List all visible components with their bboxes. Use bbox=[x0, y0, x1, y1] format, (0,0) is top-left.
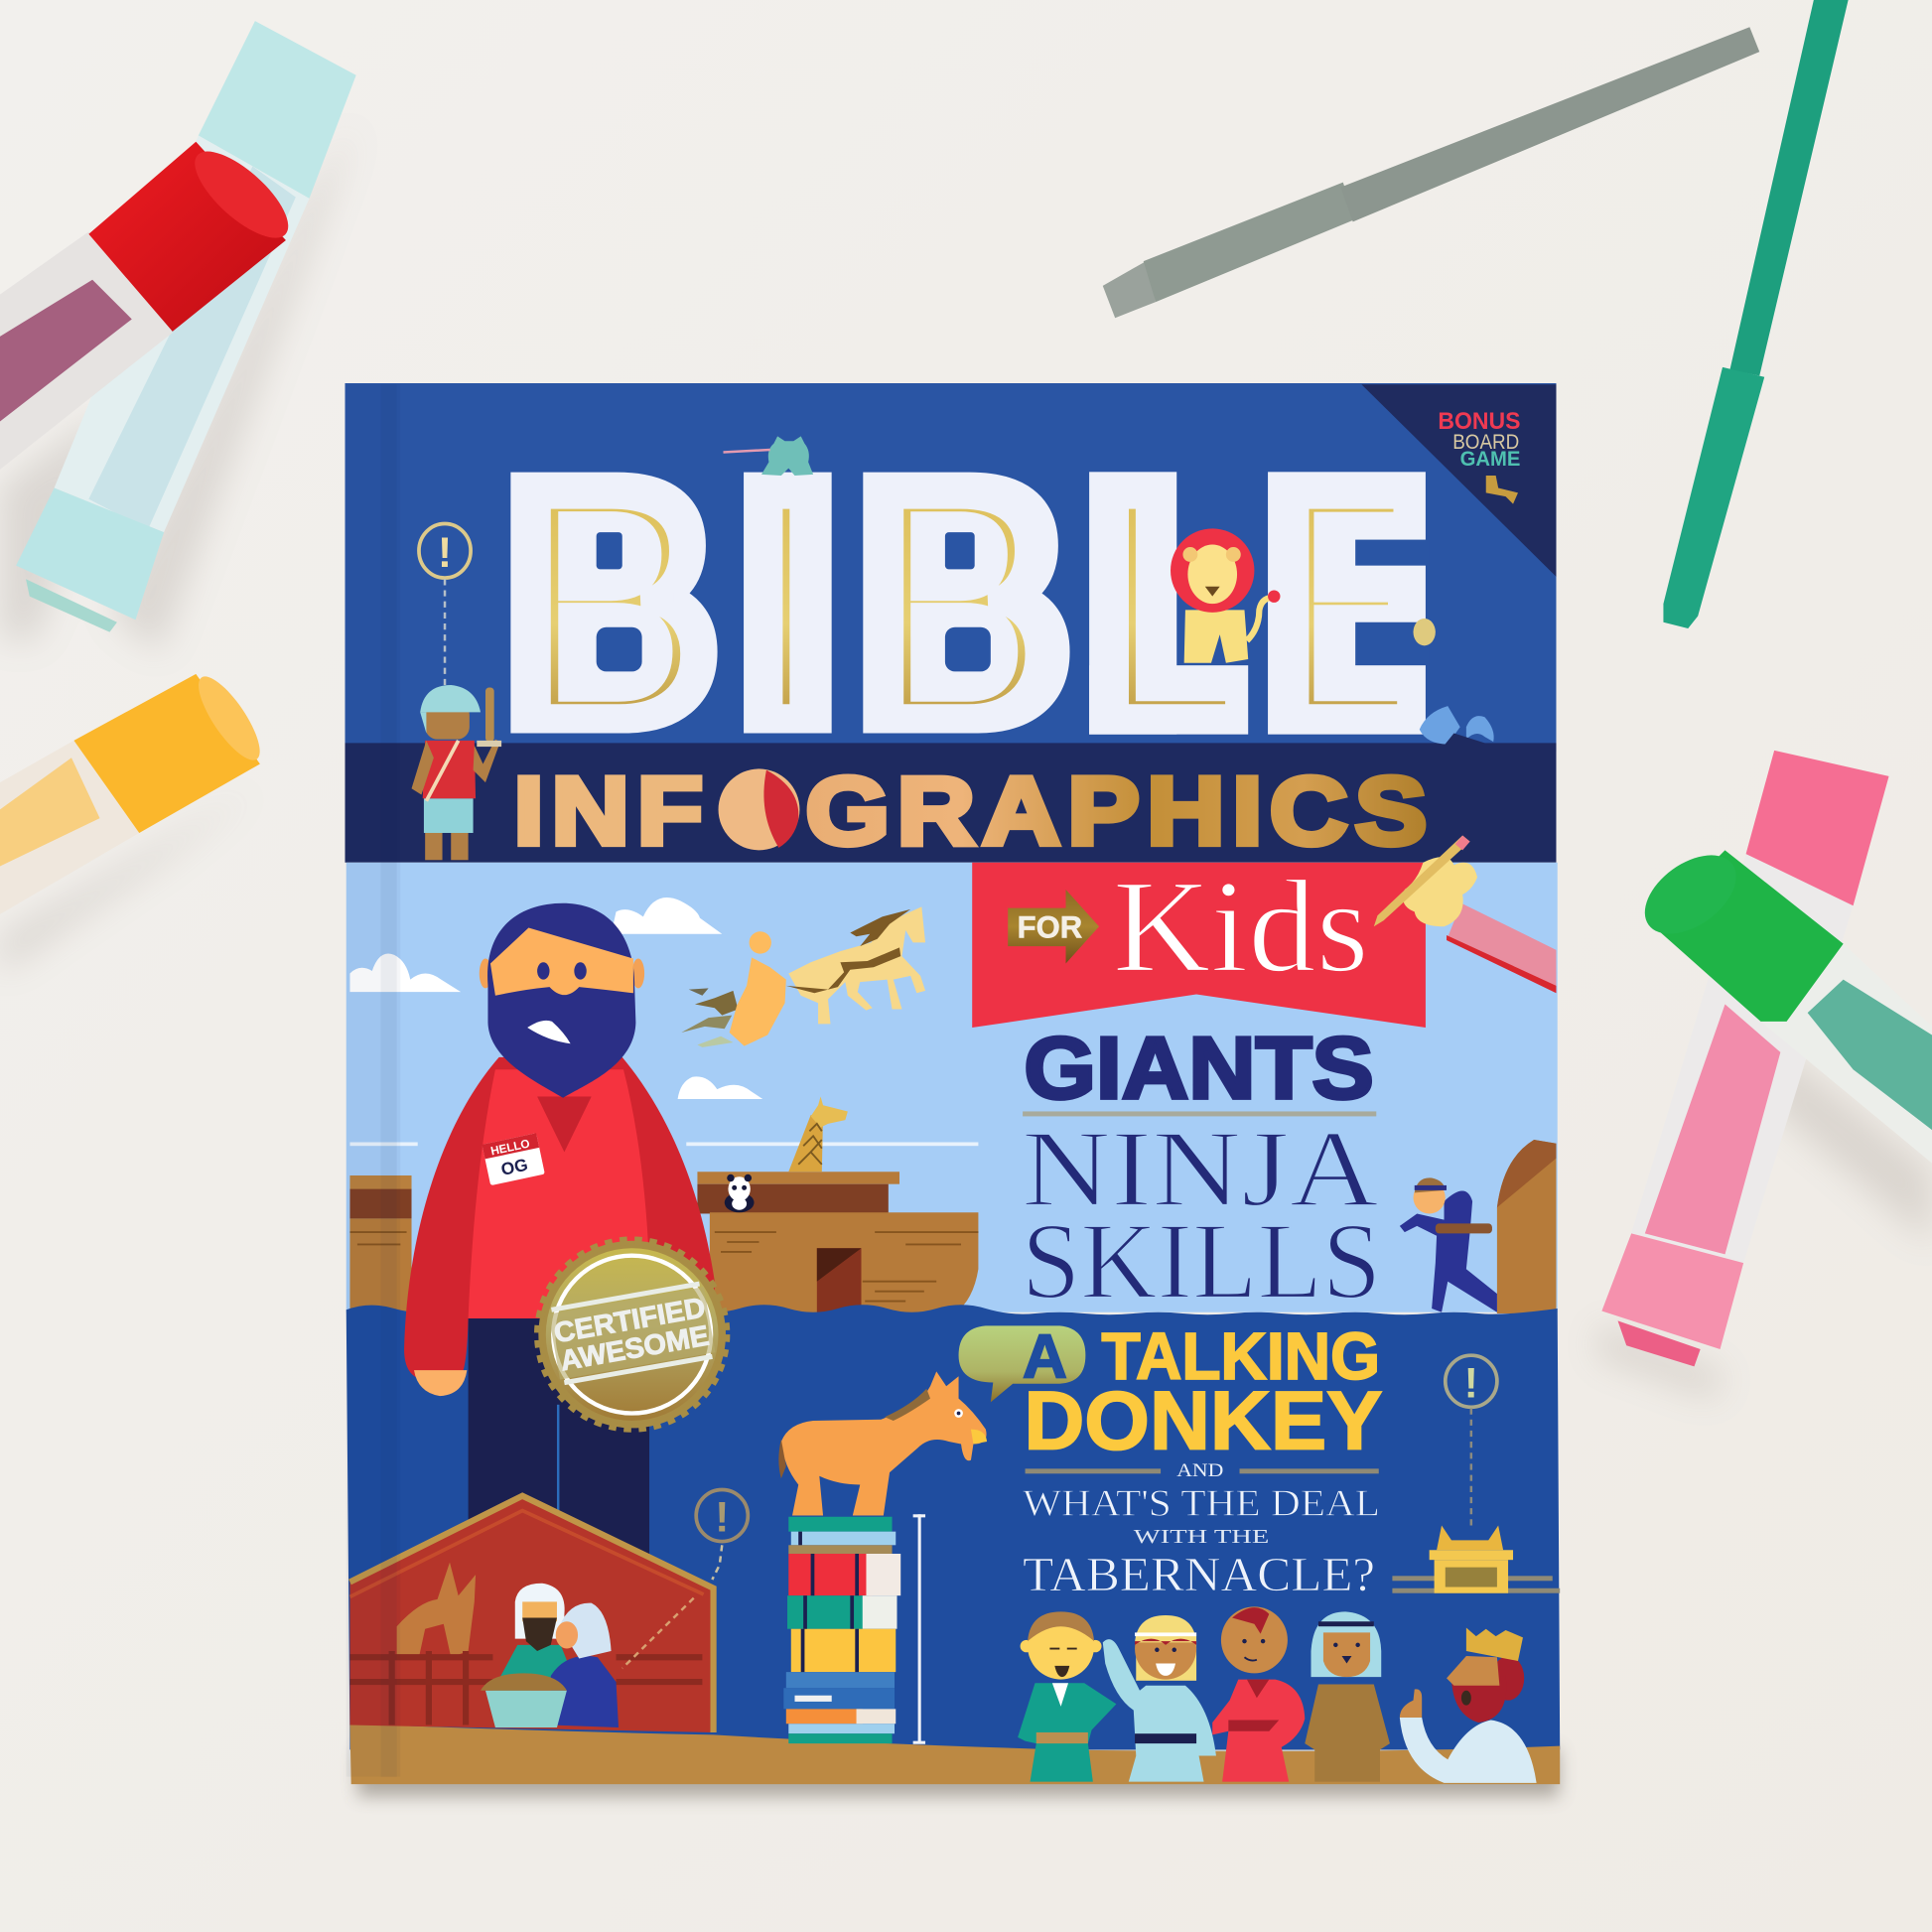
corner flash: bonus board game bbox=[1361, 384, 1556, 577]
book stack bbox=[783, 1517, 900, 1743]
letter block shapes bbox=[557, 472, 1426, 735]
person: boy in teal robe bbox=[1018, 1611, 1116, 1782]
shadows under markers bbox=[0, 123, 1932, 1399]
pen: green felt tip bbox=[1663, 0, 1849, 628]
coin on E bbox=[1414, 619, 1436, 645]
alert marker soldier: ! bbox=[438, 529, 452, 576]
big bible letters: E bbox=[1258, 418, 1414, 796]
for arrow bbox=[1008, 890, 1099, 964]
big bible letters: I bbox=[737, 416, 839, 788]
and divider bbox=[1026, 1460, 1379, 1481]
ninja skills heading bbox=[1022, 1108, 1381, 1321]
tabernacle text: WHAT'S THE DEAL bbox=[1023, 1483, 1380, 1525]
for arrow: FOR bbox=[1018, 909, 1082, 944]
certified awesome seal bbox=[538, 1241, 726, 1428]
spine shading bbox=[346, 384, 400, 1777]
tabernacle text: TABERNACLE? bbox=[1023, 1549, 1375, 1601]
talking donkey heading: TALKING bbox=[1102, 1319, 1380, 1394]
og: sweater torso bbox=[469, 1069, 650, 1318]
frog bbox=[724, 436, 813, 476]
stable bbox=[349, 1496, 714, 1732]
gold foil letter outlines bbox=[518, 431, 1411, 782]
pen: light blue marker bbox=[16, 21, 356, 632]
infographics gold title: INF bbox=[514, 758, 703, 865]
pen: yellow cap marker bbox=[0, 668, 270, 914]
pen: grey felt tip bbox=[1103, 27, 1759, 318]
ninja skills heading: SKILLS bbox=[1022, 1200, 1381, 1321]
gold foil letter outlines: E bbox=[1288, 432, 1411, 782]
certified awesome seal: AWESOME bbox=[558, 1320, 712, 1377]
alert marker tabernacle: ! bbox=[1464, 1359, 1478, 1406]
infographics gold title bbox=[514, 758, 1427, 865]
ark of the covenant bbox=[1392, 1525, 1560, 1593]
og: hand bbox=[414, 1370, 467, 1396]
person: man in brown robe bbox=[1305, 1611, 1390, 1782]
stable: mary bbox=[551, 1603, 619, 1727]
og: hair and beard bbox=[487, 903, 635, 1098]
kids title: Kids bbox=[1113, 853, 1369, 1000]
stable: joseph bbox=[492, 1584, 573, 1691]
corner flash: bonus board game: GAME bbox=[1460, 448, 1520, 471]
horse mane and reins bbox=[786, 947, 900, 993]
counters bbox=[597, 532, 1430, 671]
certified awesome seal: CERTIFIED bbox=[552, 1292, 708, 1349]
and divider: AND bbox=[1176, 1460, 1223, 1481]
pen: green cap marker bbox=[1630, 839, 1932, 1164]
pen: red cap marker bbox=[0, 138, 301, 470]
fish bbox=[1420, 706, 1497, 752]
stable: fence bbox=[349, 1651, 702, 1725]
og: ears bbox=[480, 959, 644, 988]
cover: top blue area bbox=[345, 383, 1556, 752]
panda bbox=[725, 1174, 755, 1212]
og giant bbox=[404, 903, 715, 1593]
talking donkey heading bbox=[1024, 1319, 1382, 1467]
chariot flames bbox=[681, 988, 738, 1047]
rock ark at right bbox=[1497, 1140, 1556, 1313]
ninja skills heading: NINJA bbox=[1022, 1108, 1379, 1229]
cover: sky bbox=[346, 863, 1558, 1312]
corner flash: bonus board game: BOARD bbox=[1452, 431, 1519, 454]
lion bbox=[1171, 528, 1280, 663]
big pencil and hand bbox=[1374, 835, 1556, 993]
cover: dark navy band bbox=[345, 743, 1556, 863]
og: name tag: OG bbox=[499, 1155, 529, 1179]
gold foil letter outlines: B bbox=[518, 431, 704, 782]
book shadow bbox=[357, 1749, 1559, 1796]
alert marker tabernacle bbox=[1446, 1355, 1497, 1525]
big bible letters: L bbox=[1078, 416, 1233, 795]
og: eyes bbox=[537, 962, 587, 980]
horse body bbox=[788, 906, 925, 1024]
talking donkey heading: DONKEY bbox=[1024, 1375, 1382, 1467]
book cover bbox=[345, 383, 1560, 1784]
cloud behind head bbox=[612, 897, 722, 934]
corner flash: bonus board game: BONUS bbox=[1438, 408, 1520, 434]
height marker bbox=[913, 1514, 925, 1744]
big bible letters: B bbox=[505, 416, 717, 787]
infographics gold title: GRAPHICS bbox=[806, 758, 1427, 865]
og: face bbox=[490, 928, 633, 996]
gold foil letter outlines: L bbox=[1099, 431, 1242, 782]
soldier bbox=[412, 685, 501, 860]
alert marker soldier bbox=[419, 523, 471, 685]
alert marker stable bbox=[622, 1489, 748, 1668]
red banner bbox=[972, 863, 1426, 1028]
og: legs bbox=[469, 1315, 649, 1593]
tabernacle text bbox=[1023, 1483, 1380, 1601]
horizon lines bbox=[349, 1142, 978, 1146]
water bbox=[346, 1305, 1560, 1749]
speech bubble with A: A bbox=[1023, 1323, 1067, 1392]
person: red-robed man bbox=[1212, 1606, 1305, 1782]
stable: manger bbox=[481, 1673, 567, 1727]
giants heading: GIANTS bbox=[1024, 1019, 1374, 1117]
og: name tag: HELLO bbox=[489, 1137, 531, 1158]
cloud left bbox=[349, 953, 461, 992]
alert marker stable: ! bbox=[715, 1494, 729, 1541]
speech bubble with A bbox=[959, 1323, 1085, 1402]
tabernacle text: WITH THE bbox=[1134, 1526, 1269, 1548]
ark left part bbox=[349, 1175, 412, 1312]
pen: pink marker bbox=[1601, 751, 1889, 1366]
stable: donkey silhouette bbox=[397, 1563, 476, 1657]
charioteer bbox=[750, 931, 771, 954]
donkey bbox=[778, 1371, 987, 1516]
gold foil letter outlines: B bbox=[874, 431, 1047, 781]
cloud lower bbox=[678, 1076, 762, 1099]
person: man in pale blue robe waving bbox=[1103, 1615, 1216, 1782]
giraffe bbox=[788, 1097, 848, 1172]
big bible letters bbox=[505, 416, 1430, 796]
ground bbox=[349, 1724, 1560, 1784]
og: name tag bbox=[482, 1133, 545, 1185]
big bible letters: B bbox=[858, 416, 1069, 787]
og: mouth bbox=[527, 1021, 571, 1043]
og: sweater arms bbox=[404, 1057, 715, 1380]
gold foil letter outlines: I bbox=[751, 431, 822, 782]
gold chariot and horse bbox=[681, 906, 925, 1047]
ninja bbox=[1400, 1177, 1497, 1312]
ark right part bbox=[349, 1172, 978, 1313]
person: king bbox=[1400, 1627, 1537, 1783]
